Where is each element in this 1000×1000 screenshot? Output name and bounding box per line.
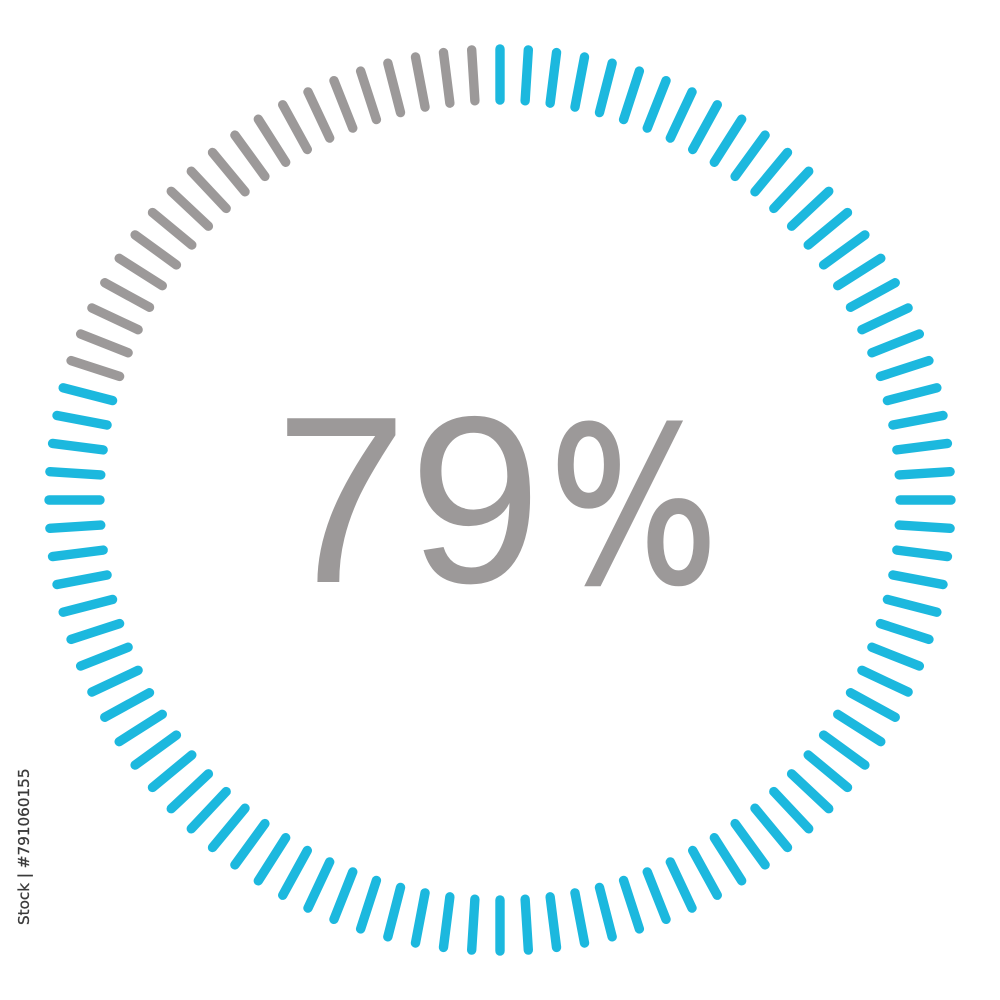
progress ring: grey remaining ticks (71, 50, 475, 376)
stock id caption: Stock | #791060155 (15, 768, 33, 925)
percentage value: 79 (275, 368, 541, 633)
percentage value: % (549, 381, 718, 633)
percentage value (275, 368, 718, 633)
